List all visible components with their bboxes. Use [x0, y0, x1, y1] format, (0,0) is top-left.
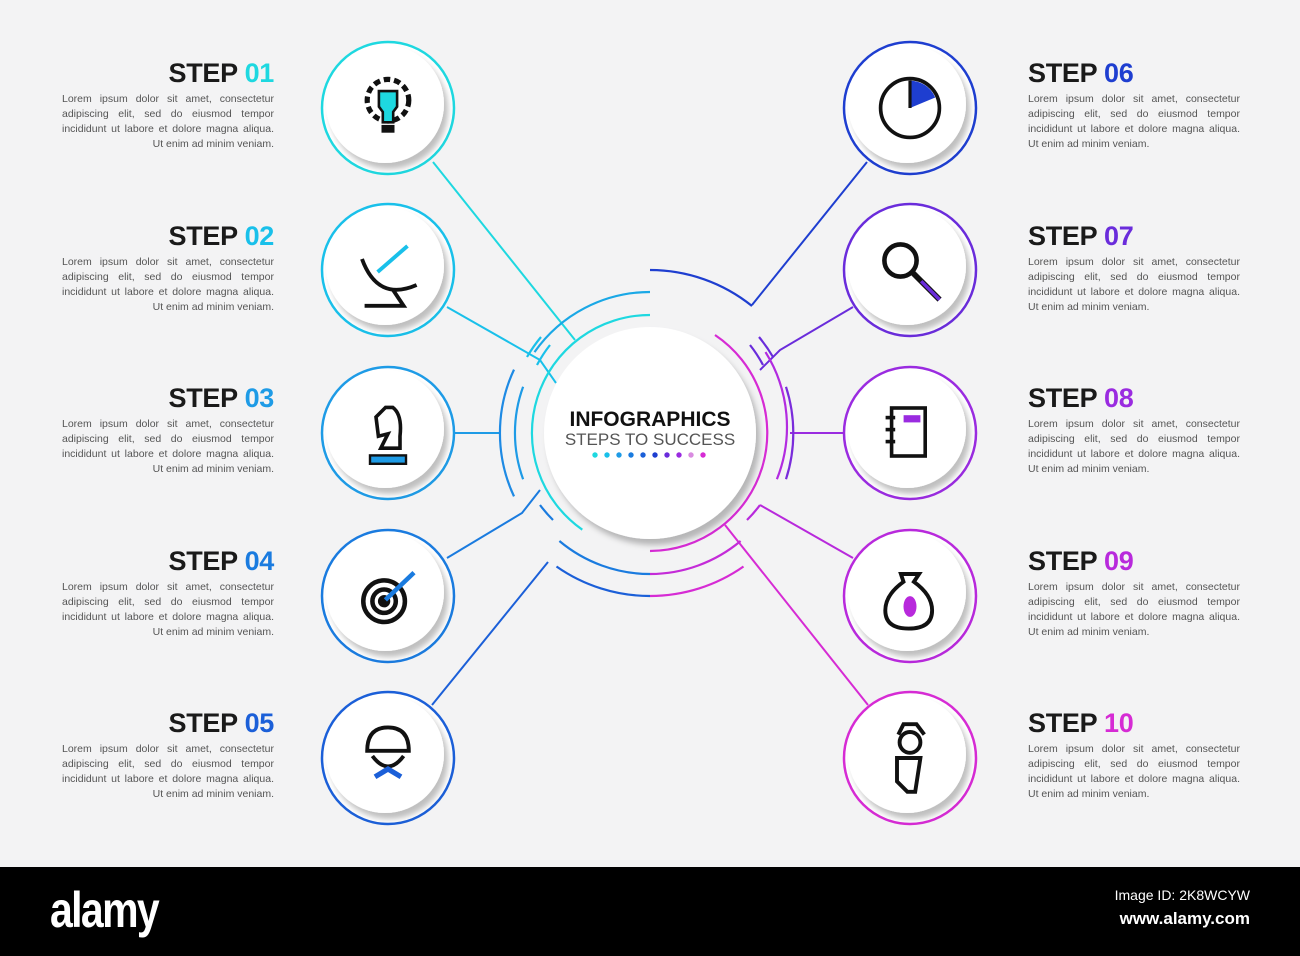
step circle 01 — [322, 42, 454, 174]
step 06 text: Lorem ipsum dolor sit amet, consectetur adipiscing elit, sed do eiusmod tempor incididunt ut labore et dolore magna aliqua. Ut enim ad minim veniam. — [1028, 93, 1240, 150]
step circle 08 — [844, 367, 976, 499]
step circle 04 — [322, 530, 454, 662]
step 02 text: Lorem ipsum dolor sit amet, consectetur adipiscing elit, sed do eiusmod tempor incididunt ut labore et dolore magna aliqua. Ut enim ad minim veniam. — [62, 256, 274, 313]
step 06 text — [1028, 58, 1240, 150]
step 09 text — [1028, 546, 1240, 638]
icon: satellite dish — [362, 246, 417, 306]
step circle 07 — [844, 204, 976, 336]
icon: chess knight — [370, 407, 406, 464]
step 10 text: Lorem ipsum dolor sit amet, consectetur adipiscing elit, sed do eiusmod tempor incididunt ut labore et dolore magna aliqua. Ut enim ad minim veniam. — [1028, 743, 1240, 800]
connectors left — [432, 162, 575, 705]
step 02 text — [62, 221, 274, 313]
step 10 text: STEP 10 — [1028, 708, 1133, 738]
icon: hand with coin — [897, 724, 924, 792]
step 07 text — [1028, 221, 1240, 313]
footer bar — [0, 867, 1300, 956]
step 09 text: STEP 09 — [1028, 546, 1133, 576]
step 01 text: Lorem ipsum dolor sit amet, consectetur adipiscing elit, sed do eiusmod tempor incididunt ut labore et dolore magna aliqua. Ut enim ad minim veniam. — [62, 93, 274, 150]
step 03 text: Lorem ipsum dolor sit amet, consectetur adipiscing elit, sed do eiusmod tempor incididunt ut labore et dolore magna aliqua. Ut enim ad minim veniam. — [62, 418, 274, 475]
step 04 text: STEP 04 — [169, 546, 274, 576]
dots — [592, 452, 706, 458]
step circle 02 — [322, 204, 454, 336]
icon: magnifier — [884, 244, 940, 300]
icon: lightbulb gear — [367, 79, 409, 133]
icon: clock — [881, 79, 939, 137]
step 08 text: STEP 08 — [1028, 383, 1133, 413]
step 10 text — [1028, 708, 1240, 800]
step 05 text: Lorem ipsum dolor sit amet, consectetur adipiscing elit, sed do eiusmod tempor incididunt ut labore et dolore magna aliqua. Ut enim ad minim veniam. — [62, 743, 274, 800]
step circle 05 — [322, 692, 454, 824]
step circle 03 — [322, 367, 454, 499]
step 01 text: STEP 01 — [169, 58, 274, 88]
step 08 text — [1028, 383, 1240, 475]
center title: INFOGRAPHICS — [569, 408, 731, 431]
step 05 text: STEP 05 — [169, 708, 274, 738]
icon: money bag — [885, 574, 932, 629]
step circle 09 — [844, 530, 976, 662]
step 08 text: Lorem ipsum dolor sit amet, consectetur adipiscing elit, sed do eiusmod tempor incididunt ut labore et dolore magna aliqua. Ut enim ad minim veniam. — [1028, 418, 1240, 475]
website: www.alamy.com — [1120, 909, 1250, 928]
step 02 text: STEP 02 — [169, 221, 274, 251]
arcs right — [650, 270, 793, 596]
step 09 text: Lorem ipsum dolor sit amet, consectetur adipiscing elit, sed do eiusmod tempor incididunt ut labore et dolore magna aliqua. Ut enim ad minim veniam. — [1028, 581, 1240, 638]
image id: Image ID: 2K8WCYW — [1115, 887, 1250, 903]
logo text: alamy — [50, 882, 158, 938]
icon: notebook — [886, 408, 925, 456]
step 04 text: Lorem ipsum dolor sit amet, consectetur adipiscing elit, sed do eiusmod tempor incididunt ut labore et dolore magna aliqua. Ut enim ad minim veniam. — [62, 581, 274, 638]
step 05 text — [62, 708, 274, 800]
step 06 text: STEP 06 — [1028, 58, 1133, 88]
step 07 text: STEP 07 — [1028, 221, 1133, 251]
step 04 text — [62, 546, 274, 638]
icon: target — [363, 573, 414, 622]
connectors right — [725, 162, 868, 705]
arcs left — [500, 292, 650, 596]
step circle 10 — [844, 692, 976, 824]
center subtitle: STEPS TO SUCCESS — [565, 430, 735, 449]
center circle — [544, 327, 756, 539]
icon: worker helmet — [367, 727, 409, 777]
step 01 text — [62, 58, 274, 150]
step circle 06 — [844, 42, 976, 174]
step 03 text — [62, 383, 274, 475]
step 07 text: Lorem ipsum dolor sit amet, consectetur adipiscing elit, sed do eiusmod tempor incididunt ut labore et dolore magna aliqua. Ut enim ad minim veniam. — [1028, 256, 1240, 313]
step 03 text: STEP 03 — [169, 383, 274, 413]
